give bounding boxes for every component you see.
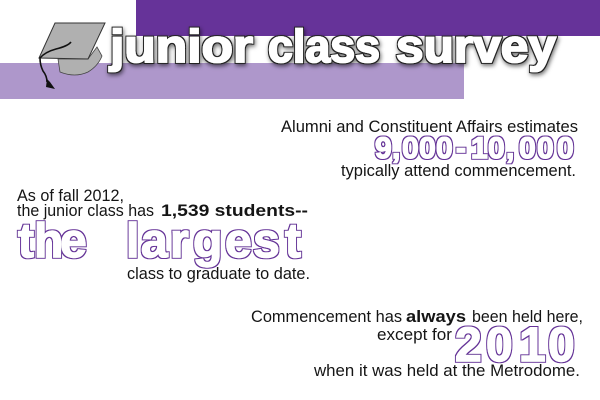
text block: commencement location: when it was held at the Metrodome. [313,361,580,380]
title: class [268,20,380,72]
dark purple banner [136,0,600,36]
text block: junior class size: As of fall 2012, [17,186,124,205]
title [109,20,556,72]
title: survey [396,20,556,72]
icon: graduation cap [39,23,105,89]
big number: attendance: 9,000-10,000 [375,132,574,165]
text block: commencement location: Commencement has [251,307,402,326]
light purple banner [0,63,464,99]
big number: 2010: 2010 [455,319,575,372]
text block: junior class size: 1,539 students-- [161,201,308,220]
text block: commencement attendance [281,117,578,180]
big words: the largest: the largest [18,215,301,268]
title: junior [109,20,253,72]
text block: junior class size [17,186,310,283]
text block: commencement location: been held here, [472,307,583,326]
text block: junior class size: class to graduate to date. [127,264,310,283]
text block: commencement location: except for [377,325,452,344]
text block: commencement attendance: typically attend commencement. [341,161,576,180]
text block: junior class size: the junior class has [17,201,154,220]
text block: commencement attendance: Alumni and Constituent Affairs estimates [281,117,578,136]
text block: commencement location: always [406,307,466,326]
text block: commencement location [251,307,583,380]
